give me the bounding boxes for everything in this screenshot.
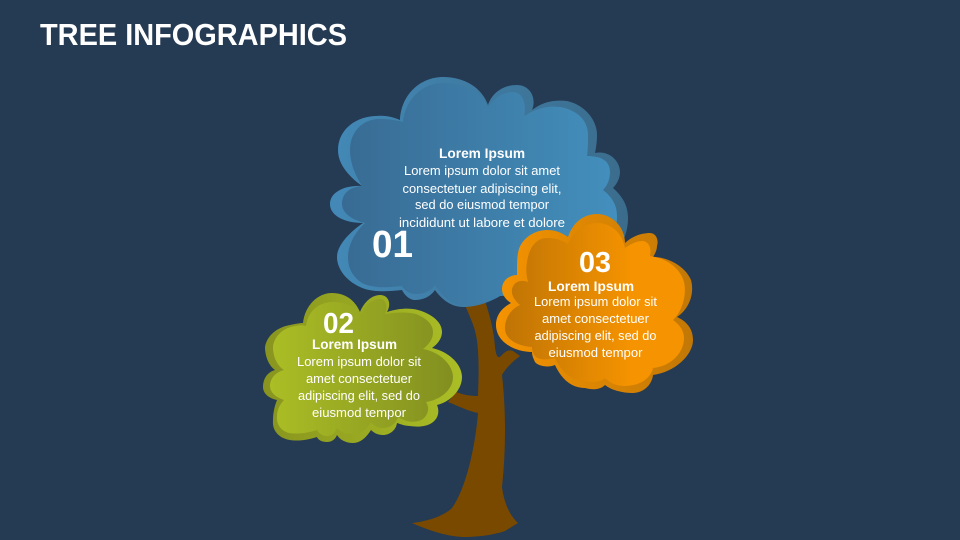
label: 01 heading and text: sed do eiusmod tempor <box>415 198 549 212</box>
label: 02 heading and text: eiusmod tempor <box>312 406 406 420</box>
cloud 01: blue <box>330 77 628 307</box>
label: 02 heading and text: Lorem ipsum dolor sit <box>297 355 422 369</box>
label: 03 heading and text: adipiscing elit, sed do <box>534 329 656 343</box>
number 01: 01 <box>372 224 413 266</box>
label: 03 heading and text <box>534 279 658 360</box>
number 02: 02 <box>323 308 354 340</box>
label: 03 heading and text: amet consectetuer <box>542 312 649 326</box>
number 03: 03 <box>579 247 611 279</box>
label: 02 heading and text: Lorem Ipsum <box>312 337 397 352</box>
label: 01 heading and text: consectetuer adipiscing elit, <box>402 182 562 196</box>
cloud 02: green <box>263 293 462 443</box>
tree trunk <box>412 298 520 537</box>
label: 01 heading and text: incididunt ut labore et dolore <box>399 216 565 230</box>
label: 01 heading and text: Lorem ipsum dolor sit amet <box>404 164 561 178</box>
label: 02 heading and text: amet consectetuer <box>306 372 412 386</box>
label: 01 heading and text: Lorem Ipsum <box>439 146 525 161</box>
label: 01 heading and text <box>399 146 565 230</box>
label: 03 heading and text: Lorem Ipsum <box>548 279 634 294</box>
label: 02 heading and text: adipiscing elit, sed do <box>298 389 420 403</box>
label: 03 heading and text: Lorem ipsum dolor sit <box>534 295 658 309</box>
label: 03 heading and text: eiusmod tempor <box>548 346 642 360</box>
label: 02 heading and text <box>297 337 422 420</box>
cloud 03: orange <box>496 214 693 393</box>
title: TREE INFOGRAPHICS <box>40 18 347 52</box>
